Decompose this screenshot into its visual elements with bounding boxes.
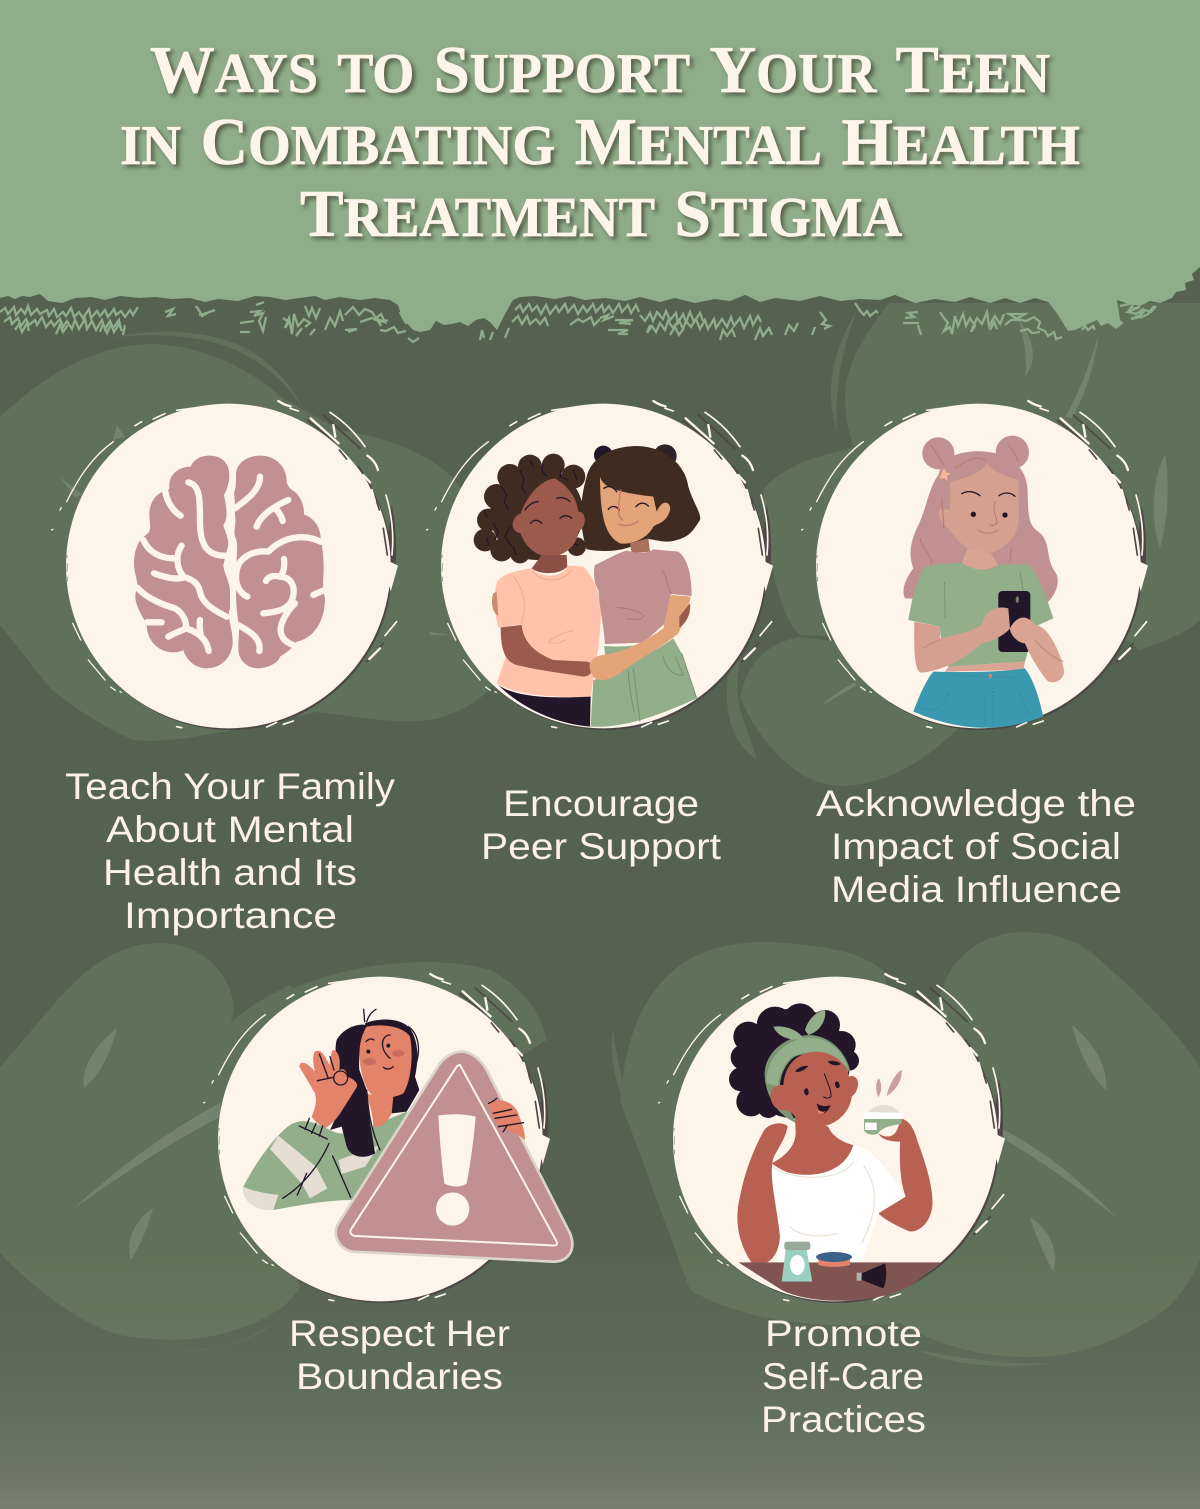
torn edge shards: [0, 302, 1156, 342]
caption: teach your family: Health and Its: [103, 852, 357, 893]
torn header band: [0, 0, 1200, 332]
title: in Combating Mental Health: [120, 94, 1080, 182]
bottom lightening overlay: [0, 1256, 1200, 1509]
brush circle 3: [802, 401, 1148, 730]
icon: brain: [134, 456, 325, 668]
caption: promote self-care: [761, 1313, 926, 1440]
caption: teach your family: Importance: [124, 895, 337, 936]
brush circle 1: [52, 401, 398, 730]
brush circle 2: [427, 401, 773, 730]
caption: social media: [816, 783, 1136, 910]
caption: encourage peer support: [481, 783, 722, 867]
illustration: girl applying skincare: [729, 1003, 941, 1301]
caption: social media: Impact of Social: [831, 826, 1121, 867]
title: [120, 22, 1080, 254]
background leaf shapes: [0, 303, 1200, 1366]
caption: teach your family: Teach Your Family: [65, 766, 396, 807]
panel: respect boundaries: [204, 974, 572, 1303]
caption: teach your family: About Mental: [106, 809, 354, 850]
caption: encourage peer support: Encourage: [503, 783, 699, 824]
caption: teach your family: [65, 766, 396, 936]
illustration: two friends hugging: [474, 444, 700, 727]
caption: promote self-care: Self-Care: [762, 1356, 924, 1397]
caption: respect her boundaries: [289, 1313, 510, 1397]
caption: social media: Media Influence: [831, 869, 1122, 910]
title: Ways to Support Your Teen: [150, 22, 1050, 110]
caption: promote self-care: Practices: [761, 1399, 926, 1440]
caption: respect her boundaries: Boundaries: [296, 1356, 503, 1397]
brush circle 4: [204, 974, 550, 1303]
brush circle 5: [659, 974, 1005, 1303]
captions: [65, 766, 1136, 1440]
panel: self-care: [659, 974, 1005, 1303]
panel: teach your family: [52, 401, 398, 730]
caption: social media: Acknowledge the: [816, 783, 1136, 824]
caption: promote self-care: Promote: [765, 1313, 922, 1354]
illustration: girl with warning sign: [243, 1009, 572, 1262]
illustration: girl with phone: [903, 436, 1064, 728]
panel: encourage peer support: [427, 401, 773, 730]
caption: encourage peer support: Peer Support: [481, 826, 722, 867]
panel: social media: [802, 401, 1148, 730]
title: Treatment Stigma: [300, 166, 903, 254]
caption: respect her boundaries: Respect Her: [289, 1313, 510, 1354]
